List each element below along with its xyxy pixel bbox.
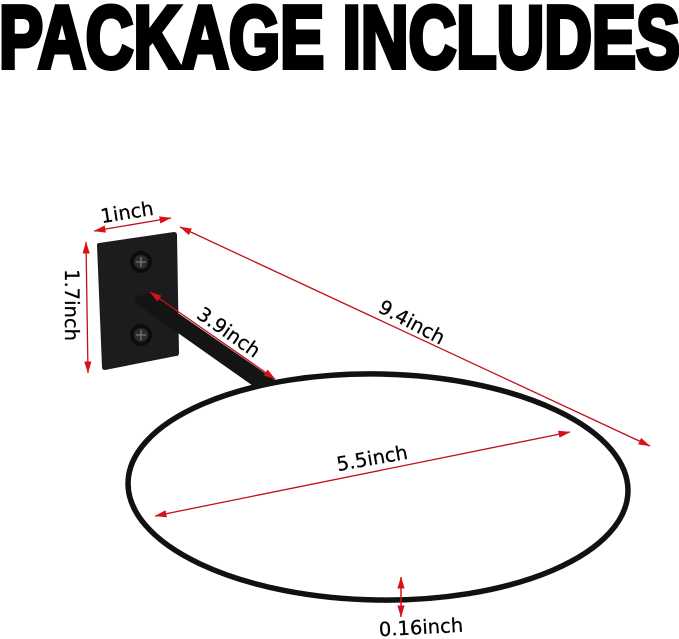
dimension: 3.9inch [150, 292, 275, 379]
support rod [134, 293, 275, 388]
metal ring [126, 370, 630, 604]
dimension: 1inch [94, 197, 171, 231]
mounting plate [97, 232, 179, 370]
dimension: 5.5inch: 5.5inch [335, 441, 409, 476]
dimension: 5.5inch [155, 432, 570, 516]
dimension: 1.7inch: 1.7inch [60, 269, 83, 341]
screw: lower [130, 324, 152, 346]
screw: upper [130, 251, 152, 273]
dimension: 1inch: 1inch [99, 197, 155, 228]
dimension: 1.7inch [60, 242, 88, 373]
dimension: 9.4inch [180, 227, 650, 446]
dimension: 0.16inch [378, 577, 464, 639]
dimension: 9.4inch: 9.4inch [375, 295, 449, 349]
dimension: 3.9inch: 3.9inch [193, 302, 265, 362]
